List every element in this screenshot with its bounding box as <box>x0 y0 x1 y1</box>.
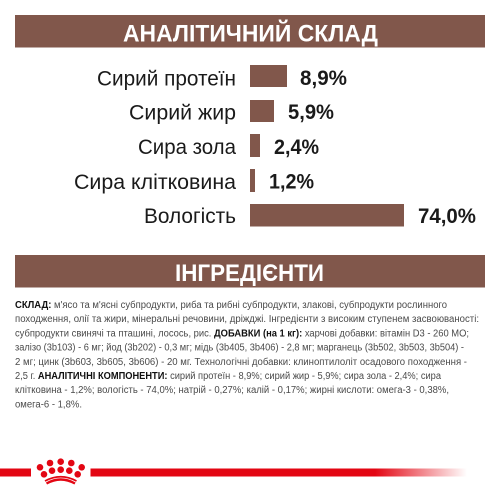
text block: composition: 2 мг; цинк (3b603, 3b605, 3b606) - 20 мг. Технологічні добавки: клиноптилоліт осадового походження - <box>15 356 467 368</box>
row: crude fibre: 1,2% <box>269 170 314 194</box>
row: moisture: 74,0% <box>418 205 476 228</box>
row: crude ash: 2,4% <box>274 136 319 159</box>
text block: composition <box>15 299 479 410</box>
row: crude fat: Сирий жир <box>129 102 236 124</box>
text block: composition: 2,5 г. АНАЛІТИЧНІ КОМПОНЕНТИ: сирий протеїн - 8,9%; сирий жир - 5,9%; сира зола - 2,4%; сира <box>15 371 441 382</box>
footer red line: left segment <box>0 468 31 476</box>
heading: analytical composition <box>15 15 485 48</box>
heading: ingredients: ІНГРЕДІЄНТИ <box>175 260 324 287</box>
text block: composition: субпродукти свинячі та пташині, лосось, рис. ДОБАВКИ (на 1 кг): харчові добавки: вітамін D3 - 260 МО; <box>15 327 469 339</box>
heading: analytical composition: АНАЛІТИЧНИЙ СКЛАД <box>123 20 378 48</box>
text block: composition: СКЛАД: м'ясо та м'ясні субпродукти, риба та рибні субпродукти, злакові, субпродукти рослинного <box>15 299 447 311</box>
row: crude protein <box>97 65 347 90</box>
text block: composition: омега-6 - 1,8%. <box>15 399 82 410</box>
bar chart: analytical composition <box>74 65 476 228</box>
row: moisture: Вологість <box>144 205 236 228</box>
text block: composition: клітковина - 1,2%; вологість - 74,0%; натрій - 0,27%; калій - 0,17%; жирні кислоти: омега-3 - 0,38%, <box>15 385 449 396</box>
footer red line: right segment with fade <box>90 468 467 476</box>
row: crude fibre <box>74 169 314 194</box>
row: moisture <box>144 204 476 228</box>
row: crude ash: Сира зола <box>138 136 236 159</box>
row: crude ash <box>138 134 319 159</box>
row: crude fat <box>129 100 334 124</box>
icon: Royal Canin crown logo <box>37 458 85 484</box>
row: crude fibre: Сира клітковина <box>74 171 236 194</box>
text block: composition: походження, олії та жири, мінеральні речовини, дріжджі. Інгредієнти з високим ступенем засвоюваності: <box>15 314 479 325</box>
row: crude fat: 5,9% <box>288 101 334 124</box>
row: crude protein: 8,9% <box>300 67 347 90</box>
text block: composition: залізо (3b103) - 6 мг; йод (3b202) - 0,3 мг; мідь (3b405, 3b406) - 2,8 мг; марганець (3b502, 3b503, 3b504) - <box>15 343 464 354</box>
heading: ingredients <box>15 255 485 288</box>
row: crude protein: Сирий протеїн <box>97 68 236 90</box>
footer red line: solid part <box>90 468 376 476</box>
